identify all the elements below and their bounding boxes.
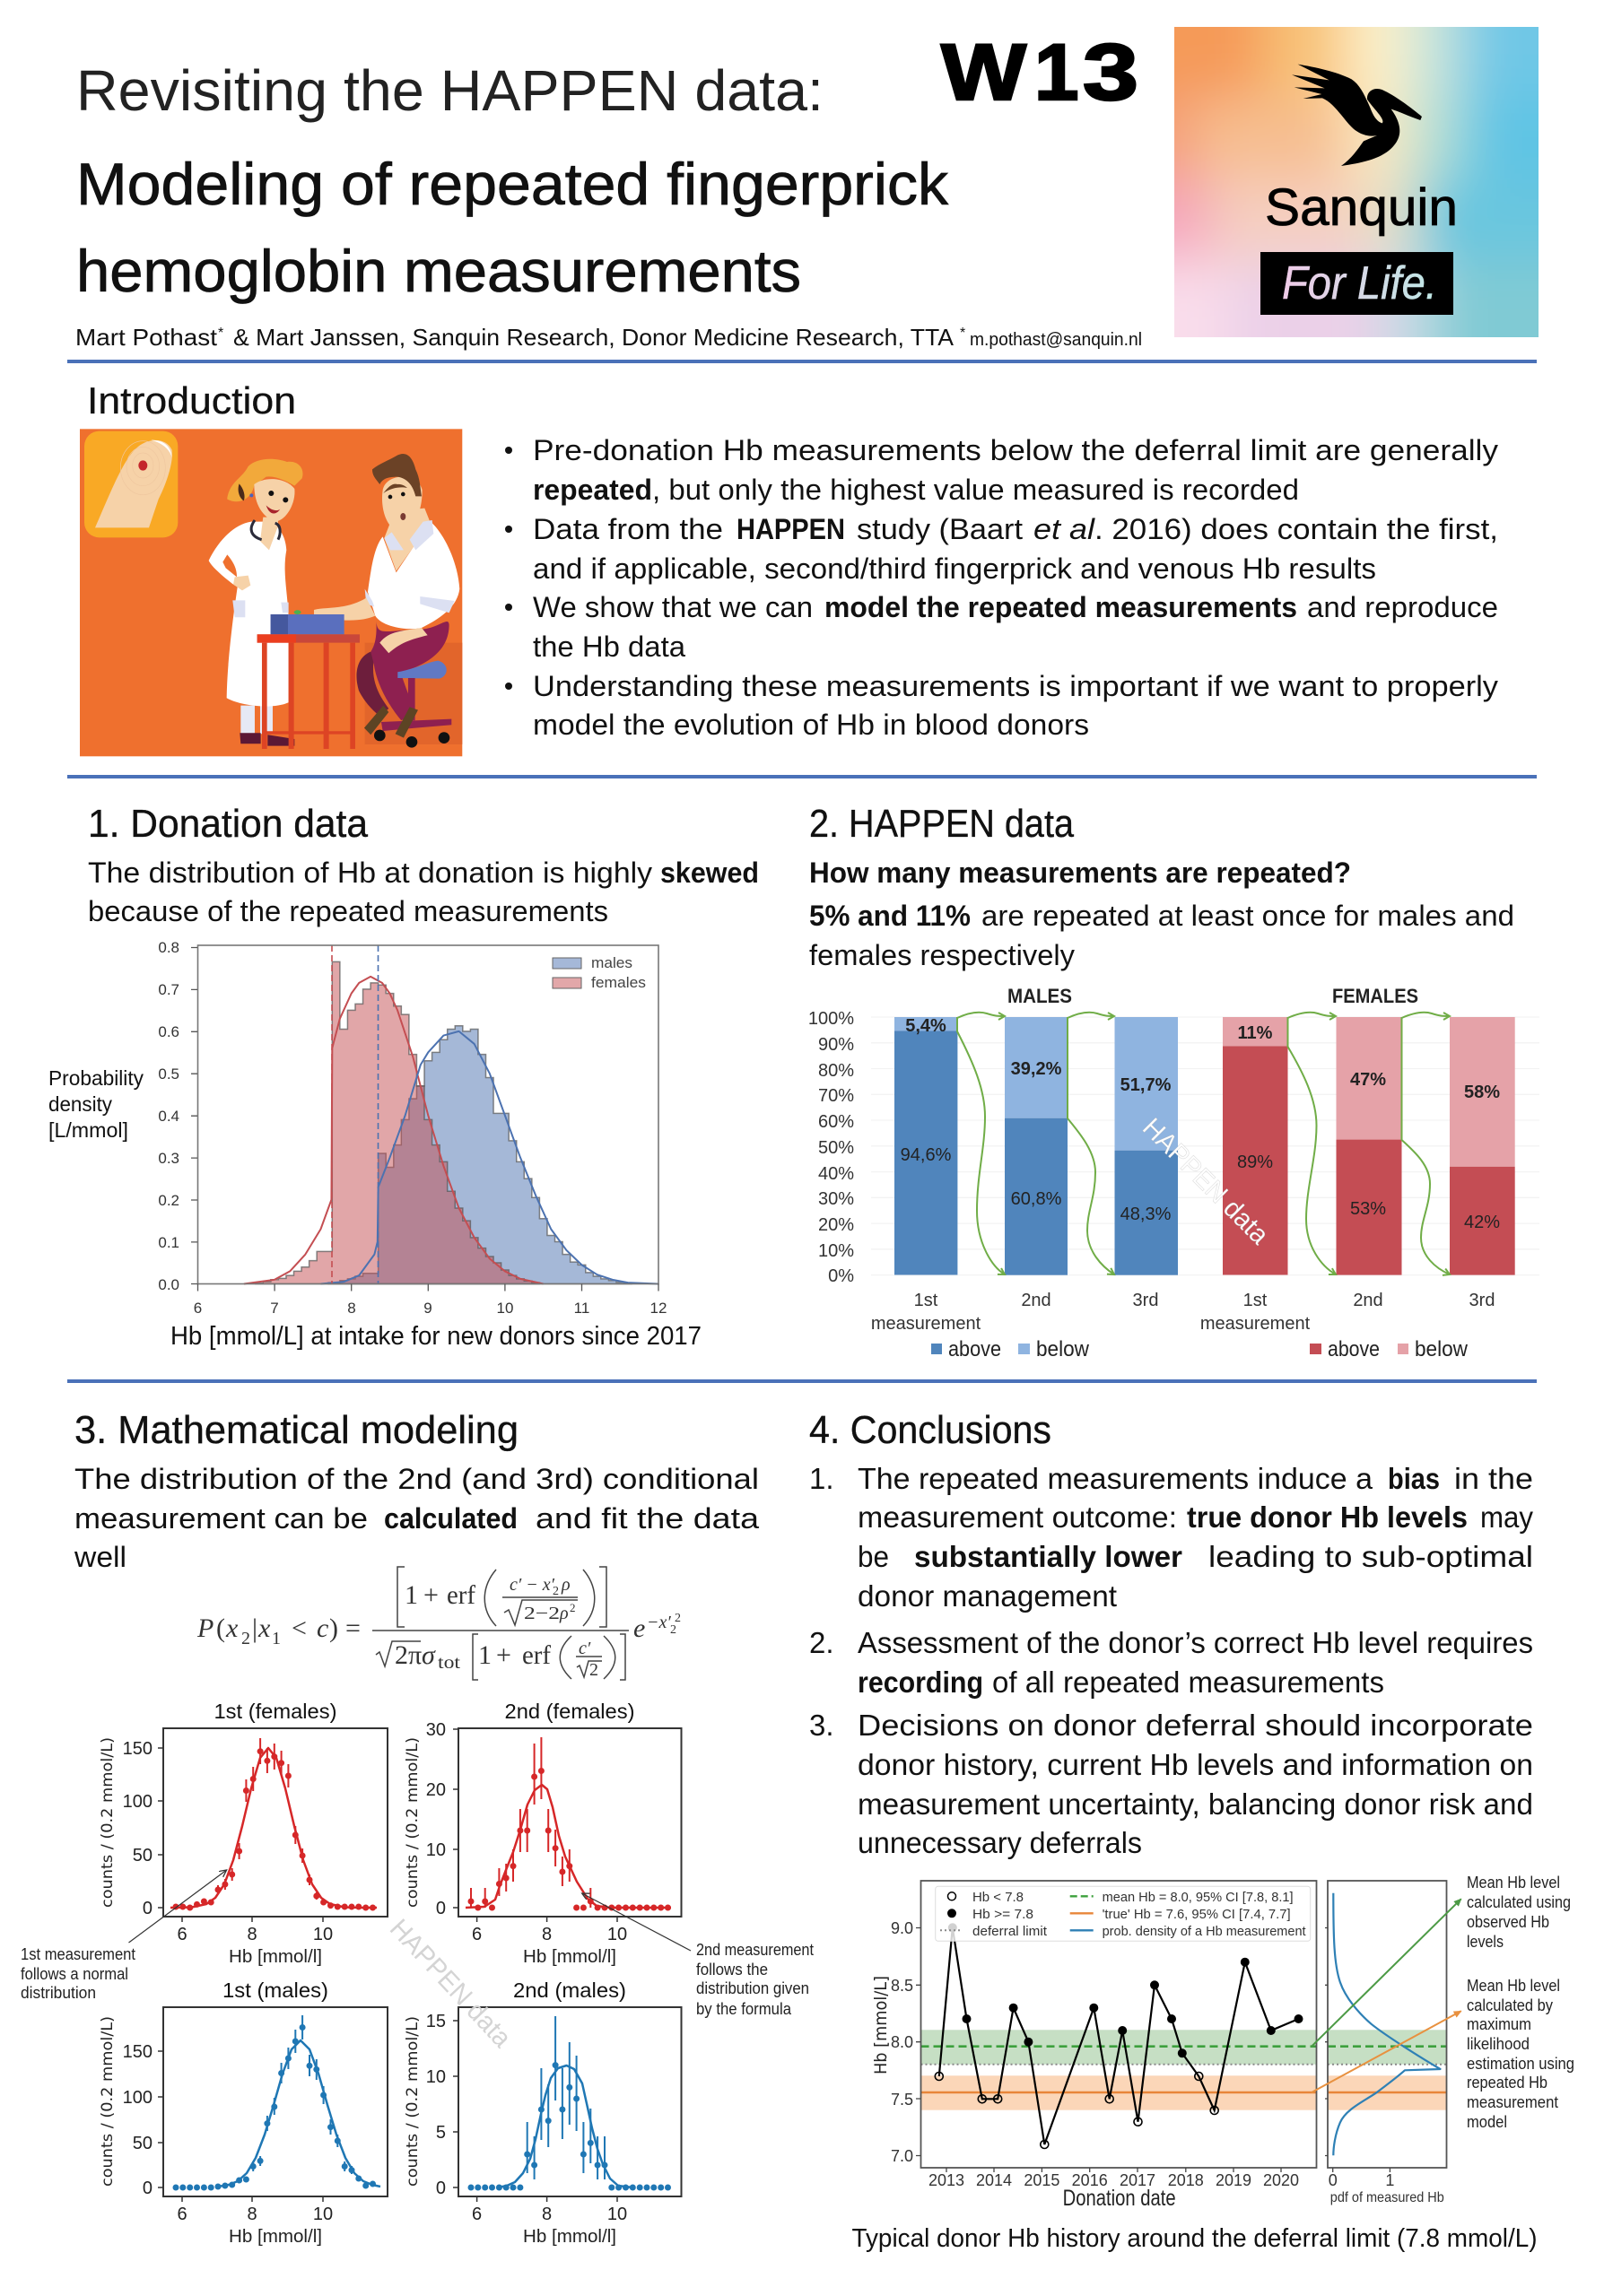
introduction bullet list: Understanding these measurements is important if we want to properly	[533, 670, 1498, 702]
logo: Sanquin For Life: For Life.	[1282, 257, 1437, 309]
side chart: pdf of measured Hb: pdf of measured Hb	[1330, 2190, 1444, 2205]
numbered conclusions: bias	[1388, 1462, 1440, 1495]
plot: 1st (males): counts / (0.2 mmol/L)	[99, 2016, 117, 2187]
numbered conclusions: Decisions on donor deferral should incorporate	[858, 1709, 1533, 1742]
plot: 1st (males): 8	[247, 2205, 257, 2224]
value labels: 42%	[1464, 1213, 1500, 1232]
chart legend: prob. density of a Hb measurement	[1103, 1924, 1306, 1939]
authors line: Mart Pothast	[75, 324, 218, 351]
logo: Sanquin For Life	[1174, 27, 1539, 337]
chart: donor Hb history: 2017	[1120, 2171, 1155, 2189]
numbered conclusions: may	[1480, 1500, 1533, 1534]
histogram: Hb distribution at donation: 0.3	[158, 1150, 179, 1167]
callout: maximum likelihood mean Hb: repeated Hb	[1467, 2074, 1547, 2092]
plot: 1st (females): 1st (females)	[214, 1700, 337, 1723]
text: modeling description: calculated	[384, 1502, 518, 1535]
value labels: 53%	[1350, 1199, 1386, 1219]
formula: +	[423, 1580, 439, 1610]
plot: 1st (males): 50	[133, 2134, 153, 2153]
callout: maximum likelihood mean Hb: likelihood	[1467, 2035, 1530, 2053]
chart legend	[553, 954, 646, 991]
side chart: pdf of measured Hb	[1325, 1881, 1446, 2205]
plot: 2nd (females): Hb [mmol/l]	[523, 1947, 616, 1967]
plot: 1st (males): 100	[123, 2088, 153, 2108]
formula: c	[317, 1613, 328, 1643]
formula: 1	[405, 1580, 418, 1610]
plot: 2nd (males): 6	[472, 2205, 482, 2224]
histogram: Hb distribution at donation: 10	[497, 1300, 513, 1317]
chart legend	[936, 1886, 1311, 1941]
icon: pelican	[1292, 65, 1422, 166]
chart legend: 'true' Hb = 7.6, 95% CI [7.4, 7.7]	[1103, 1907, 1291, 1922]
formula: 2	[670, 1623, 676, 1637]
plot: 1st (males): Hb [mmol/l]	[229, 2227, 322, 2247]
formula: 2	[553, 1585, 559, 1598]
icon: fingertip	[84, 431, 178, 537]
value labels: 89%	[1237, 1152, 1273, 1172]
value labels: 60,8%	[1011, 1189, 1062, 1209]
introduction bullet list	[505, 434, 1498, 741]
males bars	[894, 1017, 1178, 1275]
stool	[364, 661, 451, 748]
formula: σ	[422, 1640, 436, 1670]
x-axis labels: 1st	[914, 1291, 938, 1310]
callout: observed mean Hb: levels	[1467, 1933, 1504, 1951]
introduction bullet list: repeated	[533, 474, 652, 506]
introduction bullet list: . 2016) does contain the first,	[1094, 513, 1498, 545]
plot: 2nd (females): 10	[426, 1840, 446, 1860]
text: donation data description	[88, 857, 759, 927]
callout: maximum likelihood mean Hb: calculated by	[1467, 1996, 1553, 2014]
value labels: 5,4%	[905, 1016, 946, 1036]
annotation: 2nd measurement: by the formula	[696, 2000, 792, 2018]
plot: 1st (females): 50	[133, 1846, 153, 1866]
text: HAPPEN data description: 5% and 11%	[809, 900, 971, 932]
formula: 2	[589, 1660, 598, 1680]
chart: donor Hb history	[871, 1881, 1317, 2211]
chart legend: males	[591, 954, 632, 971]
plot: 1st (males): 10	[313, 2205, 333, 2224]
chart: donor Hb history: 2016	[1072, 2171, 1108, 2189]
plot: 1st (females): 8	[247, 1925, 257, 1944]
plot: 1st (females): 100	[123, 1792, 153, 1812]
legends: above	[1328, 1337, 1380, 1361]
callout: observed mean Hb: calculated using	[1467, 1893, 1571, 1911]
value labels: 94,6%	[901, 1145, 952, 1165]
numbered conclusions: donor history, current Hb levels and information on	[858, 1748, 1533, 1781]
plot: 2nd (males): 5	[436, 2123, 446, 2143]
formula: 2	[570, 1601, 576, 1614]
introduction bullet list: the Hb data	[533, 631, 685, 663]
formula: ρ	[559, 1604, 569, 1623]
formula: P	[196, 1613, 214, 1643]
histogram: Hb distribution at donation: 9	[423, 1300, 432, 1317]
histogram: Hb distribution at donation: 0.8	[158, 939, 179, 956]
watermark: HAPPEN data	[384, 1914, 517, 2054]
callout: maximum likelihood mean Hb: estimation using	[1467, 2055, 1574, 2073]
authors line: & Mart Janssen, Sanquin Research, Donor Medicine Research, TTA	[233, 324, 955, 351]
stacked bar chart: repeated measurements: 100%	[808, 1009, 854, 1029]
numbered conclusions: substantially lower	[914, 1540, 1182, 1573]
formula: ρ	[561, 1575, 571, 1595]
chart: donor Hb history: 8.0	[891, 2033, 913, 2051]
text: donation data description: because of the repeated measurements	[88, 895, 608, 927]
logo: Sanquin For Life: Sanquin	[1265, 178, 1458, 237]
numbered conclusions	[809, 1462, 1533, 1859]
introduction bullet list: Pre-donation Hb measurements below the deferral limit are generally	[533, 434, 1498, 466]
stacked bar chart: repeated measurements: 60%	[818, 1112, 854, 1132]
introduction bullet list: We show that we can	[533, 591, 813, 623]
histogram: Hb distribution at donation: 7	[270, 1300, 279, 1317]
value labels: 11%	[1238, 1023, 1273, 1043]
histogram: Hb distribution at donation	[158, 939, 667, 1317]
legends: below	[1036, 1337, 1090, 1361]
plot: 2nd (females): 8	[542, 1925, 552, 1944]
formula: <	[292, 1613, 307, 1643]
text: HAPPEN data description: females respectively	[809, 939, 1075, 971]
chart: donor Hb history: 2018	[1168, 2171, 1204, 2189]
plot: 2nd (females): counts / (0.2 mmol/L)	[404, 1737, 422, 1908]
plot: 2nd (males): 0	[436, 2179, 446, 2198]
plot: 1st (females): 10	[313, 1925, 333, 1944]
annotation: 1st measurement: distribution	[21, 1984, 96, 2002]
formula: |	[252, 1613, 257, 1643]
illustration: doctor taking fingerprick from donor	[80, 429, 462, 756]
numbered conclusions: measurement uncertainty, balancing donor risk and	[858, 1787, 1533, 1821]
histogram: Hb distribution at donation: 6	[194, 1300, 202, 1317]
arrow: observed mean	[1312, 1899, 1461, 2047]
x-axis labels: 1st	[1243, 1291, 1268, 1310]
formula: 1	[478, 1640, 492, 1670]
annotation: 1st measurement: 1st measurement	[21, 1945, 135, 1963]
value labels: 48,3%	[1120, 1205, 1172, 1224]
introduction bullet list: and reproduce	[1307, 591, 1498, 623]
formula: erf	[447, 1580, 475, 1610]
donor	[314, 454, 459, 720]
introduction bullet list: et al	[1033, 513, 1095, 545]
histogram: Hb distribution at donation: 0.4	[158, 1108, 179, 1125]
table and device	[257, 610, 360, 749]
text: HAPPEN data description	[809, 857, 1514, 971]
arrow: modelled mean	[1312, 2011, 1461, 2092]
title: hemoglobin measurements	[76, 238, 801, 304]
stacked bar chart: repeated measurements: 20%	[818, 1215, 854, 1235]
text: HAPPEN data description: are repeated at least once for males and	[981, 900, 1514, 932]
numbered conclusions: measurement outcome:	[858, 1500, 1177, 1534]
annotation: 2nd measurement: 2nd measurement	[696, 1941, 814, 1959]
legends	[931, 1337, 1469, 1361]
plot: 1st (females): 6	[177, 1925, 187, 1944]
plot: 2nd (females): 6	[472, 1925, 482, 1944]
poster number W13: 1	[1034, 27, 1078, 117]
plot: 2nd (females): 10	[607, 1925, 627, 1944]
introduction bullet list: study (Baart	[857, 513, 1023, 545]
formula: c′ − x′	[510, 1575, 555, 1595]
numbered conclusions: Assessment of the donor’s correct Hb level requires	[858, 1626, 1533, 1659]
text: modeling description: and fit the data	[536, 1502, 759, 1535]
callout: maximum likelihood mean Hb: maximum	[1467, 2015, 1531, 2033]
plot: 1st (females): counts / (0.2 mmol/L)	[99, 1737, 117, 1908]
introduction bullet list: model the evolution of Hb in blood donors	[533, 709, 1089, 741]
annotation: 2nd measurement	[582, 1893, 814, 2018]
chart legend: Hb >= 7.8	[972, 1907, 1033, 1922]
heading: 4. Conclusions: 4. Conclusions	[809, 1408, 1051, 1452]
text: donation data description: skewed	[660, 857, 759, 889]
chart: donor Hb history: 2019	[1216, 2171, 1251, 2189]
plot: 1st (males): 150	[123, 2042, 153, 2062]
x-axis labels: 2nd	[1021, 1291, 1051, 1310]
introduction bullet list: Data from the	[533, 513, 723, 545]
x-axis labels: measurement	[871, 1314, 981, 1334]
plot: 2nd (males): 10	[607, 2205, 627, 2224]
plot: 1st (females): 150	[123, 1739, 153, 1759]
authors line: *	[218, 326, 223, 341]
chart legend: females	[591, 974, 646, 991]
plot: 1st (males): 1st (males)	[222, 1979, 328, 2002]
watermark: HAPPEN data	[1137, 1113, 1275, 1250]
plot: 1st (females)	[99, 1700, 388, 1967]
plot: 2nd (females)	[404, 1700, 682, 1967]
plot: 1st (females): 0	[143, 1899, 153, 1918]
formula: 2	[675, 1612, 681, 1625]
authors line: *	[960, 326, 965, 341]
annotation: 2nd measurement: follows the	[696, 1961, 768, 1979]
stacked bar chart: repeated measurements: 40%	[818, 1164, 854, 1184]
chart: donor Hb history: 7.5	[891, 2091, 913, 2109]
formula: x	[257, 1613, 271, 1643]
x-axis labels: 2nd	[1353, 1291, 1383, 1310]
histogram: Hb distribution at donation: 0.5	[158, 1065, 179, 1083]
group titles: FEMALES	[1332, 985, 1418, 1007]
histogram: Hb distribution at donation: 0.2	[158, 1192, 179, 1209]
annotation: 1st measurement	[21, 1870, 227, 2002]
formula	[196, 1567, 681, 1680]
caption: typical donor Hb history: Typical donor Hb history around the deferral limit (7.8 mmol/L)	[852, 2224, 1538, 2253]
chart: donor Hb history: 9.0	[891, 1919, 913, 1937]
plot: 2nd (males): Hb [mmol/l]	[523, 2227, 616, 2247]
callout: observed mean Hb: observed Hb	[1467, 1913, 1549, 1931]
legends: above	[948, 1337, 1001, 1361]
doctor	[209, 459, 302, 746]
heading: 3. Mathematical modeling: 3. Mathematical modeling	[74, 1408, 519, 1452]
numbered conclusions: leading to sub-optimal	[1208, 1540, 1533, 1573]
plot: 1st (females): Hb [mmol/l]	[229, 1947, 322, 1967]
stacked bar chart: repeated measurements: 10%	[818, 1241, 854, 1261]
chart: donor Hb history: 2015	[1024, 2171, 1059, 2189]
introduction bullet list: and if applicable, second/third fingerprick and venous Hb results	[533, 552, 1376, 585]
numbered conclusions: of all repeated measurements	[992, 1665, 1384, 1699]
poster number W13: W	[941, 27, 1026, 117]
chart: donor Hb history: 2013	[928, 2171, 964, 2189]
plot: 2nd (males): counts / (0.2 mmol/L)	[404, 2016, 422, 2187]
chart: donor Hb history: 8.5	[891, 1977, 913, 1995]
plot: 2nd (males): 8	[542, 2205, 552, 2224]
histogram: Hb distribution at donation: 8	[347, 1300, 356, 1317]
x-axis label: Hb at intake: Hb [mmol/L] at intake for new donors since 2017	[170, 1322, 702, 1351]
side chart: pdf of measured Hb: 0	[1329, 2171, 1338, 2189]
callout: maximum likelihood mean Hb: model	[1467, 2113, 1507, 2131]
stacked bar chart: repeated measurements: 80%	[818, 1061, 854, 1081]
stacked bar chart: repeated measurements: 30%	[818, 1189, 854, 1209]
introduction bullet list: HAPPEN	[737, 513, 845, 545]
formula: erf	[522, 1640, 551, 1670]
numbered conclusions: true donor Hb levels	[1187, 1500, 1468, 1534]
histogram: Hb distribution at donation: 12	[650, 1300, 667, 1317]
plot: 2nd (males): 10	[426, 2067, 446, 2087]
annotation: 1st measurement: follows a normal	[21, 1965, 128, 1983]
stacked bar chart: repeated measurements: 90%	[818, 1035, 854, 1055]
stacked bar chart: repeated measurements: 50%	[818, 1138, 854, 1158]
x-axis labels	[871, 1291, 1495, 1334]
formula: c′	[579, 1639, 591, 1658]
authors line	[75, 324, 1142, 351]
legends: below	[1415, 1337, 1469, 1361]
chart: donor Hb history: 7.0	[891, 2147, 913, 2165]
y-axis label: probability density: density	[48, 1092, 112, 1116]
plot: 2nd (females): 2nd (females)	[504, 1700, 635, 1723]
formula: 2−2	[524, 1604, 560, 1623]
formula: tot	[438, 1653, 461, 1673]
heading: Introduction: Introduction	[87, 379, 296, 422]
plot: 1st (males): 6	[177, 2205, 187, 2224]
formula: 2	[241, 1629, 250, 1648]
y-axis label: probability density: Probability	[48, 1066, 144, 1090]
histogram: Hb distribution at donation: 0.0	[158, 1276, 179, 1293]
chart: donor Hb history: 2020	[1263, 2171, 1299, 2189]
x-axis labels: measurement	[1200, 1314, 1311, 1334]
group titles: MALES	[1007, 985, 1072, 1007]
poster number W13	[941, 27, 1138, 117]
text: modeling description: measurement can be	[74, 1502, 368, 1535]
numbered conclusions: recording	[858, 1665, 983, 1699]
numbered conclusions: donor management	[858, 1579, 1117, 1613]
numbered conclusions: in the	[1454, 1462, 1533, 1495]
plot: 1st (males): 0	[143, 2179, 153, 2198]
plot: 2nd (males)	[404, 1979, 682, 2247]
annotation: 2nd measurement: distribution given	[696, 1979, 809, 1997]
formula: 1	[272, 1629, 281, 1648]
text: HAPPEN data description: How many measurements are repeated?	[809, 857, 1351, 889]
numbered conclusions: 3.	[809, 1709, 834, 1742]
chart legend: mean Hb = 8.0, 95% CI [7.8, 8.1]	[1103, 1890, 1294, 1905]
formula: =	[345, 1613, 361, 1643]
histogram: Hb distribution at donation: 0.6	[158, 1023, 179, 1040]
formula: 2π	[395, 1640, 422, 1670]
text: donation data description: The distribution of Hb at donation is highly	[88, 857, 652, 889]
poster number W13: 3	[1083, 27, 1138, 117]
stacked bar chart: repeated measurements: 0%	[828, 1266, 854, 1286]
title: Modeling of repeated fingerprick	[76, 151, 949, 217]
chart legend: Hb < 7.8	[972, 1890, 1024, 1905]
value labels	[901, 1016, 1500, 1232]
text: modeling description: The distribution of the 2nd (and 3rd) conditional	[74, 1463, 759, 1495]
side chart: pdf of measured Hb: 1	[1385, 2171, 1394, 2189]
value labels: 47%	[1350, 1070, 1386, 1090]
histogram: Hb distribution at donation: 11	[574, 1300, 589, 1317]
numbered conclusions: The repeated measurements induce a	[858, 1462, 1373, 1495]
callout: observed mean Hb: Mean Hb level	[1467, 1874, 1560, 1892]
chart: donor Hb history: Hb [mmol/L]	[871, 1976, 891, 2074]
numbered conclusions: 2.	[809, 1626, 834, 1659]
authors line: m.pothast@sanquin.nl	[970, 330, 1142, 350]
y-axis label: probability density	[48, 1066, 144, 1142]
callout: maximum likelihood mean Hb: measurement	[1467, 2093, 1558, 2111]
value labels: 51,7%	[1120, 1075, 1172, 1095]
title	[76, 58, 949, 304]
heading: 1. Donation data: 1. Donation data	[88, 802, 369, 846]
plot: 2nd (females): 30	[426, 1720, 446, 1740]
introduction bullet list: model the repeated measurements	[824, 591, 1297, 623]
formula: (	[216, 1613, 225, 1643]
callout: maximum likelihood mean Hb: Mean Hb level	[1467, 1977, 1560, 1995]
numbered conclusions: be	[858, 1540, 889, 1573]
formula: e	[633, 1613, 645, 1643]
plot: 2nd (males): 15	[426, 2012, 446, 2031]
callout: maximum likelihood mean Hb	[1467, 1977, 1574, 2131]
formula: +	[496, 1640, 511, 1670]
formula: −x′	[647, 1613, 671, 1632]
y-axis label: probability density: [L/mmol]	[48, 1118, 128, 1142]
group titles	[1007, 985, 1418, 1007]
heading: 2. HAPPEN data: 2. HAPPEN data	[809, 802, 1074, 846]
chart: donor Hb history: Donation date	[1063, 2186, 1176, 2211]
stacked bar chart: repeated measurements: 70%	[818, 1086, 854, 1106]
chart legend: deferral limit	[972, 1924, 1048, 1939]
x-axis labels: 3rd	[1133, 1291, 1158, 1310]
chart: donor Hb history: 2014	[976, 2171, 1012, 2189]
x-axis labels: 3rd	[1469, 1291, 1495, 1310]
value labels: 39,2%	[1011, 1059, 1062, 1079]
formula: x	[225, 1613, 239, 1643]
text: modeling description	[74, 1463, 759, 1573]
numbered conclusions: 1.	[809, 1462, 834, 1495]
text: modeling description: well	[74, 1541, 126, 1573]
callout: observed mean Hb	[1467, 1874, 1571, 1951]
introduction bullet list: , but only the highest value measured is recorded	[652, 474, 1299, 506]
value labels: 58%	[1464, 1083, 1500, 1102]
plot: 2nd (females): 20	[426, 1780, 446, 1800]
histogram: Hb distribution at donation: 0.1	[158, 1234, 179, 1251]
title: Revisiting the HAPPEN data:	[76, 58, 824, 123]
plot: 2nd (females): 0	[436, 1899, 446, 1918]
females bars	[1223, 1017, 1515, 1275]
stacked bar chart: repeated measurements	[808, 985, 1539, 1361]
plot: 1st (males)	[99, 1979, 388, 2247]
plot: 2nd (males): 2nd (males)	[513, 1979, 626, 2002]
formula: )	[329, 1613, 338, 1643]
numbered conclusions: unnecessary deferrals	[858, 1826, 1142, 1859]
arrows between measurements	[957, 1013, 1450, 1274]
histogram: Hb distribution at donation: 0.7	[158, 981, 179, 998]
